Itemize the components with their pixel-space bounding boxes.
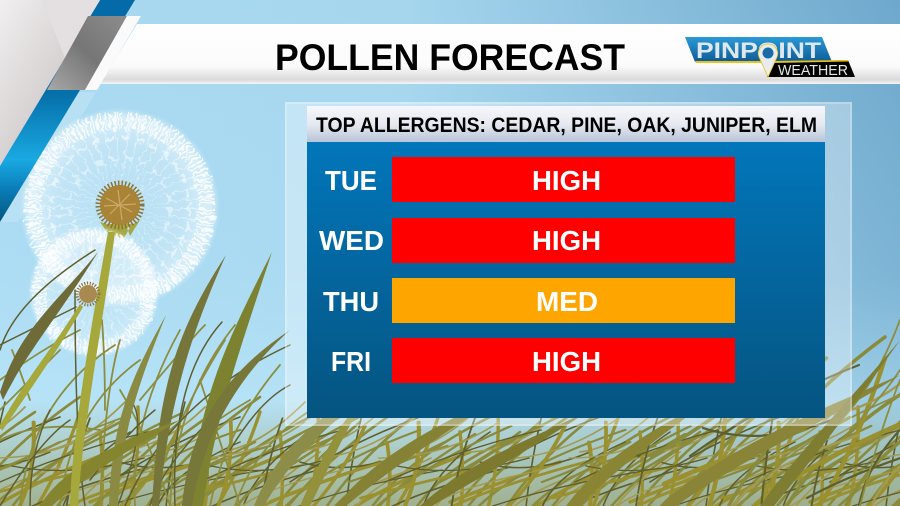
- soft shadow: [0, 92, 96, 222]
- row: Friday: FRI: [331, 346, 371, 377]
- icon: small dandelion: [28, 226, 160, 358]
- logo: Pinpoint Weather: [685, 37, 855, 79]
- row: Tuesday: TUE: [325, 165, 377, 196]
- grass: pale olive blades: [0, 320, 900, 506]
- grass: tapered large blades: [0, 252, 900, 506]
- row: Tuesday: [325, 157, 735, 202]
- row: Wednesday: [319, 218, 735, 263]
- row: Wednesday: HIGH: [532, 225, 601, 256]
- blue wedge: [0, 0, 135, 222]
- panel: forecast table: [307, 106, 825, 418]
- allergens heading: [307, 106, 825, 142]
- grass field: [0, 232, 900, 506]
- header bar: [100, 24, 900, 84]
- row: Friday: HIGH: [532, 346, 601, 377]
- row: Thursday: THU: [323, 286, 379, 317]
- row: Friday: [331, 338, 735, 383]
- allergens heading: TOP ALLERGENS: CEDAR, PINE, OAK, JUNIPER, ELM: [316, 113, 817, 137]
- icon: map pin: [758, 44, 778, 77]
- logo: Pinpoint Weather: WEATHER: [778, 63, 848, 79]
- row: Thursday: [323, 278, 735, 323]
- grass: olive haze: [0, 400, 900, 506]
- grass: dark blades: [0, 250, 290, 506]
- title: POLLEN FORECAST: [275, 37, 625, 78]
- row: Thursday: MED: [536, 286, 598, 317]
- icon: dandelion stems: [0, 232, 115, 506]
- corner dark slash: [47, 16, 141, 90]
- icon: large dandelion: [20, 108, 220, 308]
- translucent panel frame: [285, 102, 852, 426]
- icon: small dandelion head: [77, 283, 99, 305]
- logo: Pinpoint Weather: PINPOINT: [696, 38, 822, 63]
- corner graphic: [0, 0, 135, 222]
- grey wedge: [0, 0, 100, 166]
- row: Tuesday: HIGH: [532, 165, 601, 196]
- grass: repeating tufts along the bottom: [0, 337, 900, 506]
- row: Wednesday: WED: [319, 225, 384, 256]
